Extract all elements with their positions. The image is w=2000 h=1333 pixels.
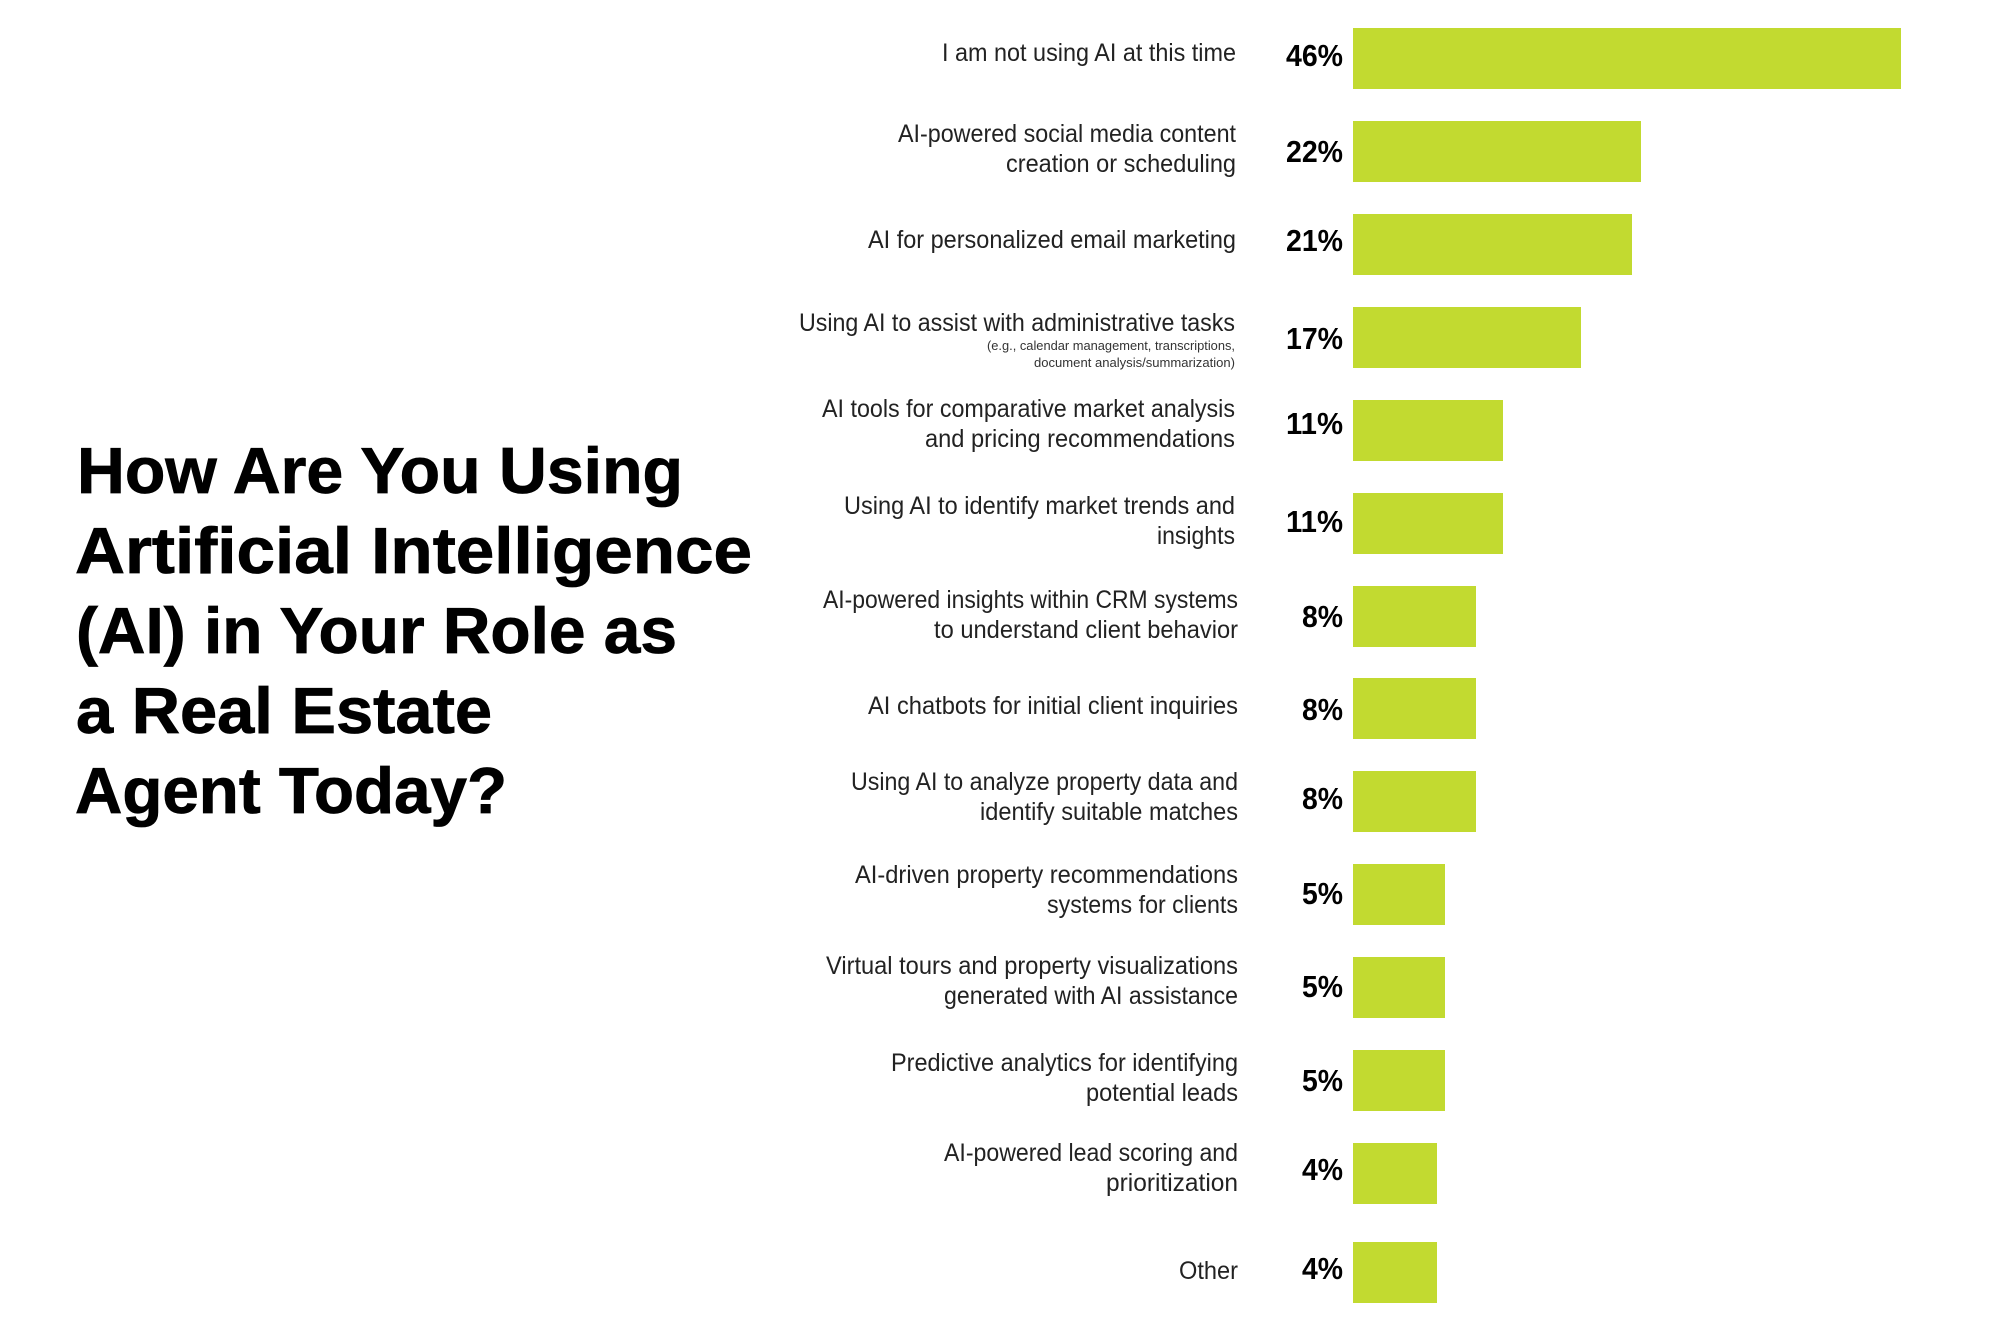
title: Artificial Intelligence (75, 514, 752, 587)
row: lead scoring 4%: AI-powered lead scoring and (944, 1139, 1238, 1167)
row: chatbots 8% (868, 678, 1476, 739)
row: personalized email 21%: AI for personalized email marketing (868, 226, 1236, 254)
row: social media content 22% (898, 120, 1641, 182)
row: CRM insights 8%: to understand client behavior (934, 616, 1238, 644)
row: other 4% (1179, 1242, 1437, 1303)
row: comparative market analysis 11%: and pricing recommendations (925, 425, 1235, 453)
row: property recommendations 5%: 5% (1302, 876, 1343, 911)
row: administrative tasks 17%: 17% (1286, 321, 1343, 356)
row: social media content 22%: AI-powered social media content (898, 120, 1236, 148)
row: chatbots 8%: AI chatbots for initial client inquiries (868, 692, 1238, 720)
row: property recommendations 5%: systems for clients (1047, 891, 1238, 919)
row: property data 8%: 8% (1302, 781, 1343, 816)
row: personalized email 21% (868, 214, 1632, 275)
row: property data 8%: Using AI to analyze property data and (851, 768, 1238, 796)
row: property recommendations 5%: AI-driven property recommendations (855, 861, 1238, 889)
row: predictive analytics 5% (891, 1049, 1445, 1111)
row: CRM insights 8%: AI-powered insights within CRM systems (823, 586, 1238, 614)
row: CRM insights 8%: 8% (1302, 599, 1343, 634)
row: predictive analytics 5%: potential leads (1086, 1079, 1238, 1107)
row: social media content 22%: 22% (1286, 134, 1343, 169)
row: chatbots 8%: 8% (1302, 692, 1343, 727)
row: market trends 11%: 11% (1286, 504, 1343, 539)
row: lead scoring 4%: 4% (1302, 1152, 1343, 1187)
row: predictive analytics 5%: 5% (1302, 1063, 1343, 1098)
row: property recommendations 5% (855, 861, 1445, 925)
title: a Real Estate (76, 674, 492, 747)
row: administrative tasks 17%: Using AI to assist with administrative tasks (799, 309, 1235, 337)
title: (AI) in Your Role as (76, 594, 677, 667)
row: personalized email 21%: 21% (1286, 223, 1343, 258)
row: virtual tours 5%: Virtual tours and property visualizations (826, 952, 1238, 980)
row: administrative tasks 17%: (e.g., calendar management, transcriptions, (987, 338, 1235, 353)
row: social media content 22%: creation or scheduling (1006, 150, 1236, 178)
row: other 4%: 4% (1302, 1251, 1343, 1286)
row: predictive analytics 5%: Predictive analytics for identifying (891, 1049, 1238, 1077)
row: comparative market analysis 11% (822, 395, 1503, 461)
row: comparative market analysis 11%: 11% (1286, 406, 1343, 441)
row: comparative market analysis 11%: AI tools for comparative market analysis (822, 395, 1235, 423)
row: market trends 11%: Using AI to identify market trends and (844, 492, 1235, 520)
row: CRM insights 8% (823, 586, 1476, 647)
row: market trends 11%: insights (1157, 522, 1235, 550)
row: virtual tours 5%: generated with AI assistance (944, 982, 1238, 1010)
row: not using AI 46%: 46% (1286, 38, 1343, 73)
row: administrative tasks 17% (799, 307, 1581, 370)
row: property data 8%: identify suitable matches (980, 798, 1238, 826)
row: market trends 11% (844, 492, 1503, 554)
title (75, 434, 752, 827)
row: virtual tours 5% (826, 952, 1445, 1018)
row: virtual tours 5%: 5% (1302, 969, 1343, 1004)
row: not using AI 46%: I am not using AI at this time (942, 39, 1236, 67)
row: other 4%: Other (1179, 1257, 1238, 1285)
title: Agent Today? (75, 754, 507, 827)
row: lead scoring 4% (944, 1139, 1437, 1204)
row: administrative tasks 17%: document analysis/summarization) (1034, 355, 1235, 370)
title: How Are You Using (77, 434, 683, 507)
row: property data 8% (851, 768, 1476, 832)
bar chart (799, 28, 1901, 1303)
row: lead scoring 4%: prioritization (1106, 1169, 1238, 1197)
row: not using AI 46% (942, 28, 1901, 89)
